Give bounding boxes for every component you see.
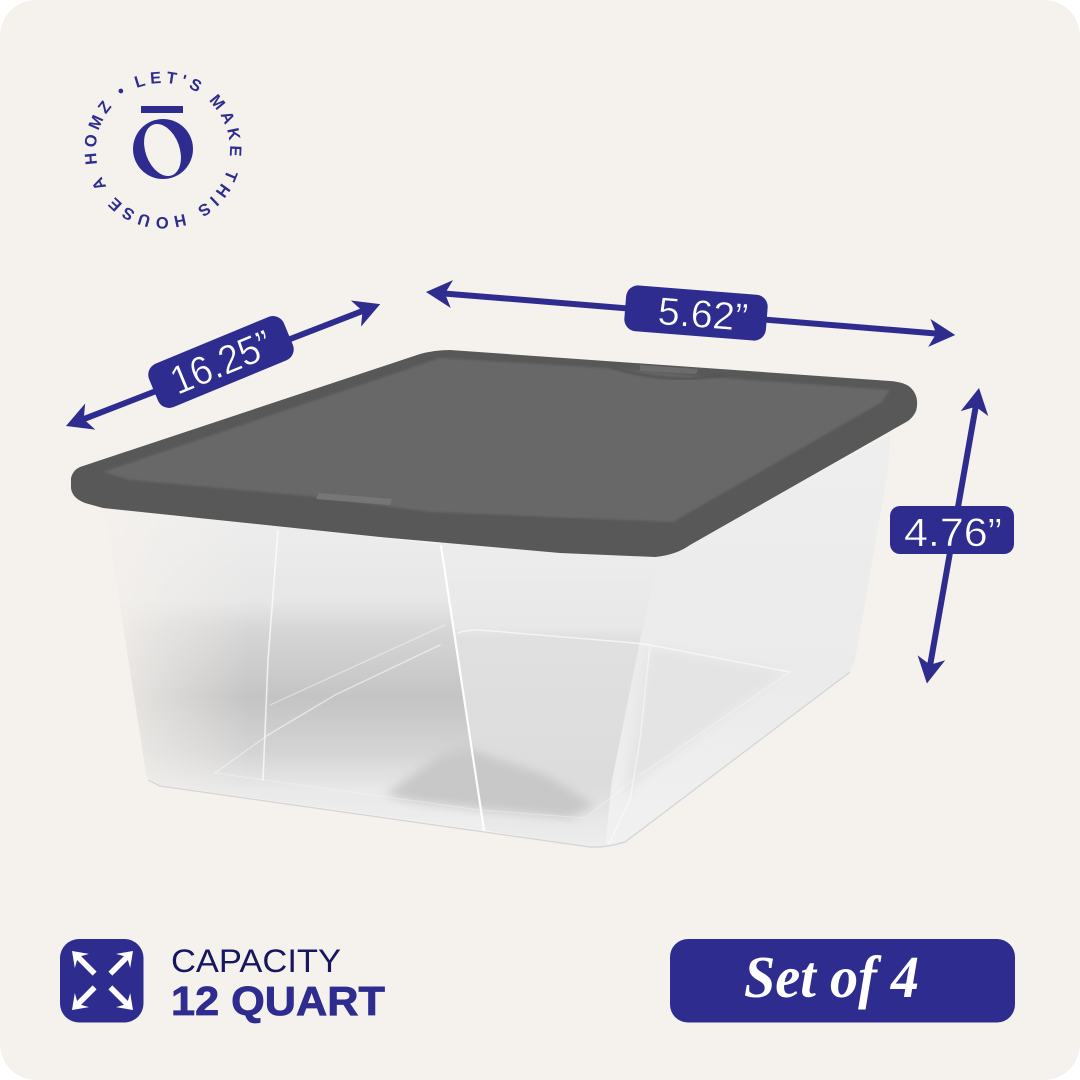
lid (71, 350, 917, 557)
label: 4.76” (904, 511, 1002, 555)
badge text: Set of 4 (744, 944, 919, 1010)
box outline bottom (148, 672, 850, 847)
arrow (61, 291, 385, 439)
box creases (215, 530, 790, 846)
lid imprint front (316, 493, 392, 505)
logo letter o (133, 119, 193, 181)
box side floor (622, 648, 785, 798)
arrow (425, 278, 956, 349)
box shadow: floor detail (385, 748, 595, 818)
logo circular slogan: LET'S MAKE THIS HOUSE A HOMZ • (84, 72, 242, 229)
lid top surface (103, 358, 890, 522)
length dimension: 5.62 inches (425, 278, 956, 349)
height dimension: 4.76 inches (890, 386, 1014, 686)
logo badge (84, 72, 242, 229)
label (145, 312, 297, 412)
capacity icon (60, 939, 144, 1022)
arrow (913, 386, 993, 686)
label (623, 285, 769, 341)
label: 5.62” (656, 290, 749, 340)
set of 4 badge (670, 939, 1015, 1022)
width dimension: 16.25 inches (61, 291, 385, 439)
logo bar (141, 106, 183, 113)
box body (122, 520, 878, 848)
label: 16.25” (164, 322, 279, 404)
lid handle recess (610, 366, 725, 379)
expand arrows (65, 944, 140, 1017)
product: storage box (71, 350, 917, 848)
lid rim (71, 350, 917, 557)
label (890, 506, 1014, 555)
capacity text (171, 943, 385, 1024)
lid imprint back (640, 365, 698, 374)
capacity value: 12 QUART (171, 978, 385, 1024)
capacity label: CAPACITY (171, 943, 341, 979)
box left edge fade (112, 548, 221, 784)
